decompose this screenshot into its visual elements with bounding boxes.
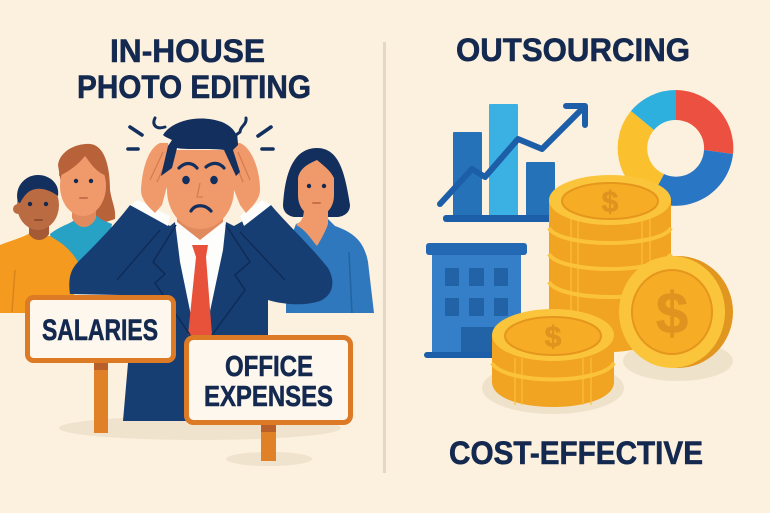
ground shadows: [59, 416, 341, 466]
coin: standing: $: [656, 281, 688, 346]
illustration: outsourcing finance: [424, 90, 733, 414]
coin stack: short: [492, 309, 614, 407]
sign: salaries: [28, 298, 174, 433]
neck and head: [177, 205, 223, 240]
face: [179, 163, 224, 168]
sign: office expenses: [186, 338, 350, 461]
coin stack: short: $: [545, 321, 562, 354]
person: woman in teal: [50, 144, 115, 290]
coin: standing: [619, 256, 733, 368]
coin stack: tall: [549, 175, 671, 352]
person: stressed man in suit: [69, 118, 332, 421]
hands: [141, 143, 172, 213]
heading: outsourcing: OUTSOURCING: [456, 32, 690, 68]
sign: salaries: SALARIES: [42, 314, 158, 347]
stress marks: [128, 127, 273, 149]
heading: in-house photo editing: PHOTO EDITING: [77, 69, 311, 105]
sign: office expenses: OFFICE: [225, 351, 313, 383]
shirt: [175, 222, 226, 335]
bar chart with rising arrow: [440, 104, 585, 222]
suit: [69, 205, 332, 421]
coin stack: tall: $: [602, 186, 619, 219]
heading: in-house photo editing: [77, 33, 311, 105]
cuffs: [130, 200, 170, 226]
illustration: stressed team and expenses: [0, 118, 374, 466]
sign: office expenses: EXPENSES: [204, 381, 333, 413]
donut chart: [618, 90, 733, 206]
lapels: [153, 225, 190, 335]
person: woman in blue: [283, 148, 374, 313]
hair: [161, 118, 240, 176]
icon: office building: [424, 243, 527, 358]
shadows under coins: [482, 341, 733, 414]
person: man in orange: [0, 175, 78, 313]
tie: [188, 245, 212, 335]
heading: cost-effective: COST-EFFECTIVE: [449, 435, 703, 471]
heading: in-house photo editing: IN-HOUSE: [110, 33, 265, 69]
